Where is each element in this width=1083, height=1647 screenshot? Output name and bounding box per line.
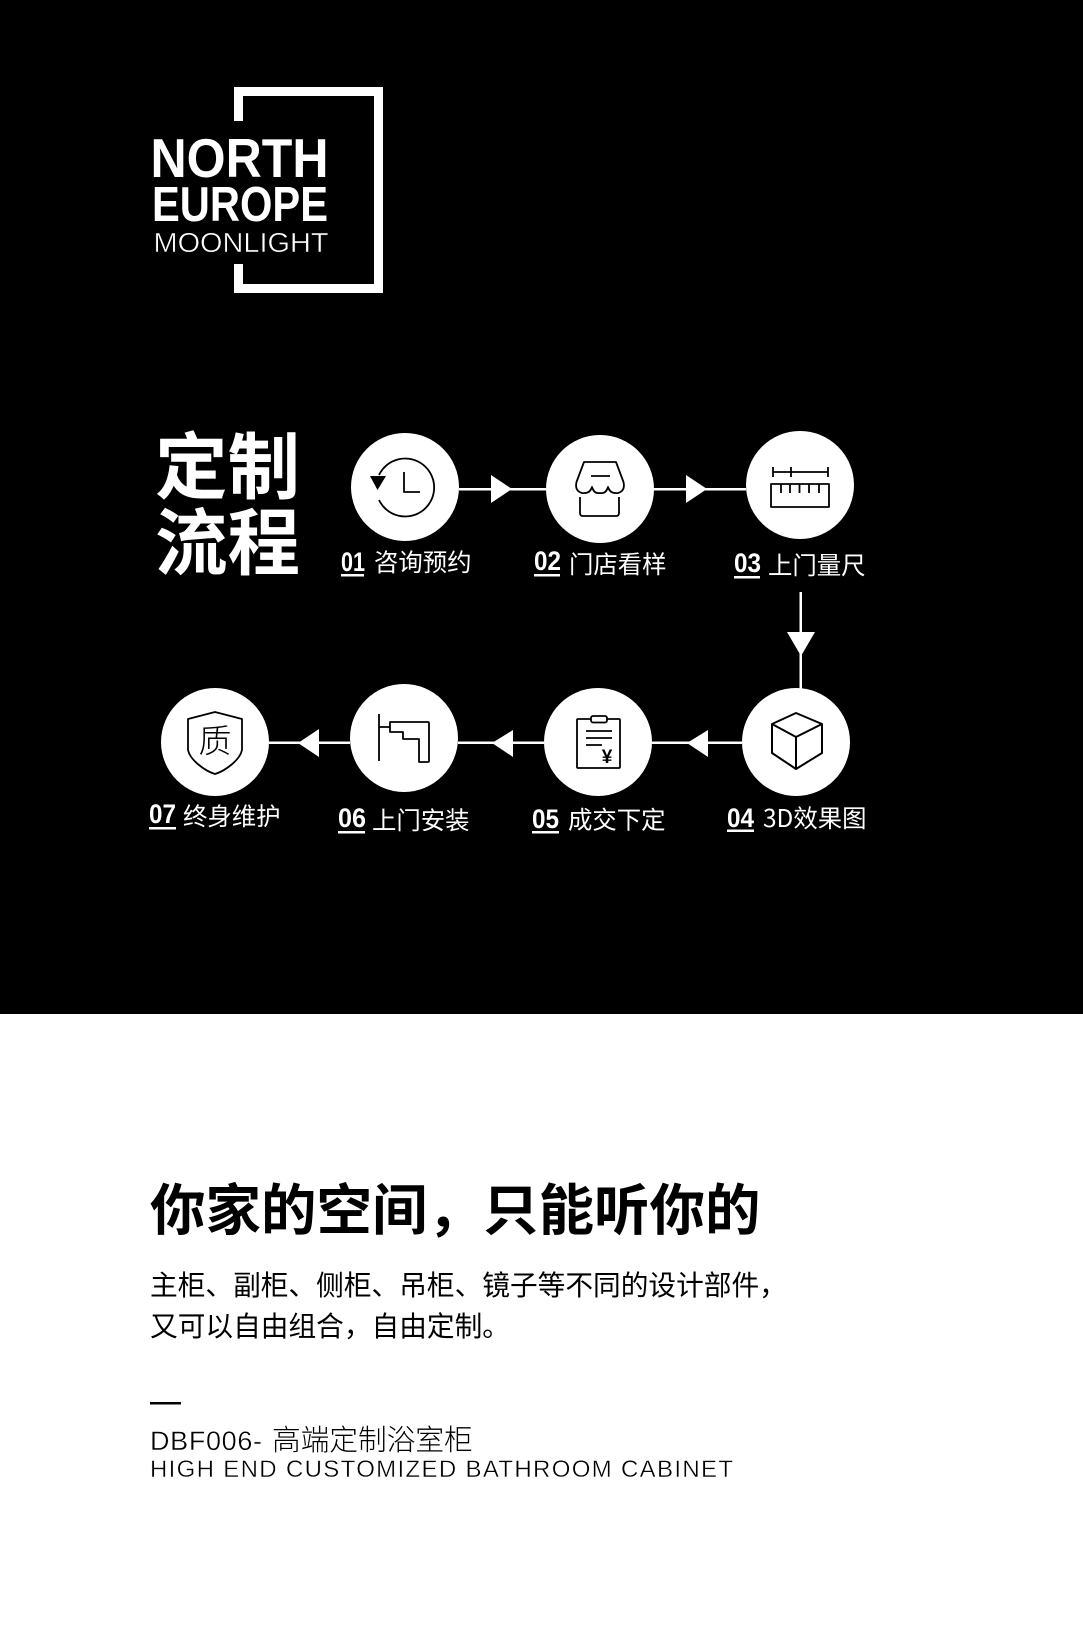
heading: 定制流程 [155,409,300,590]
logo bracket [238,92,378,288]
step 04: 3D rendering [727,688,866,835]
logo word: EUROPE: EUROPE [152,178,328,232]
step 05: place order [532,688,666,836]
label 07: 终身维护 [183,798,281,833]
heading: 定制流程: 流程 [155,485,300,590]
logo word: MOONLIGHT: MOONLIGHT [154,227,328,258]
label 04: 3D效果图 [763,800,866,835]
icon: storefront [546,435,654,543]
body text: 又可以自由组合，自由定制。 [150,1304,510,1344]
label 02: 门店看样 [569,546,667,581]
product code: DBF006- [150,1426,262,1456]
logo [150,92,378,288]
flow connectors and arrows [269,475,815,757]
label 01: 咨询预约 [374,544,472,579]
product subtitle: HIGH END CUSTOMIZED BATHROOM CABINET [150,1456,733,1483]
step 02: store visit [534,435,667,581]
accent dash [150,1402,181,1404]
icon: clipboard with yen [544,688,652,796]
icon: clock with return arrow [351,433,459,541]
icon: quality shield [161,688,269,796]
product code [150,1418,473,1459]
step 03: measure [734,431,866,582]
label 05: 成交下定 [568,802,666,836]
body text: 主柜、副柜、侧柜、吊柜、镜子等不同的设计部件， [150,1263,787,1303]
label 01: 01 [341,547,365,577]
panel: black process section [0,0,1083,1014]
icon: cabinet layout [350,684,458,792]
label 03: 03 [734,548,761,578]
step 06: installation [338,684,470,837]
label 06: 上门安装 [372,802,470,837]
icon: clipboard with yen: ¥ [602,747,613,768]
step 07: lifetime maintenance [149,688,281,833]
label 04: 04 [727,803,754,833]
body text [150,1263,787,1344]
icon: ruler [746,431,854,539]
label 03: 上门量尺 [768,547,866,582]
step 01: consult [341,433,472,579]
label 07: 07 [149,799,176,829]
heading: 定制流程: 定制 [155,409,300,514]
label 06: 06 [338,803,366,833]
icon: quality shield: 质 [198,714,232,762]
logo word: NORTH: NORTH [150,127,328,189]
headline: 你家的空间，只能听你的 [150,1166,761,1246]
label 02: 02 [534,546,561,576]
label 05: 05 [532,804,559,834]
icon: cube [742,688,850,796]
product code: 高端定制浴室柜 [272,1418,473,1459]
